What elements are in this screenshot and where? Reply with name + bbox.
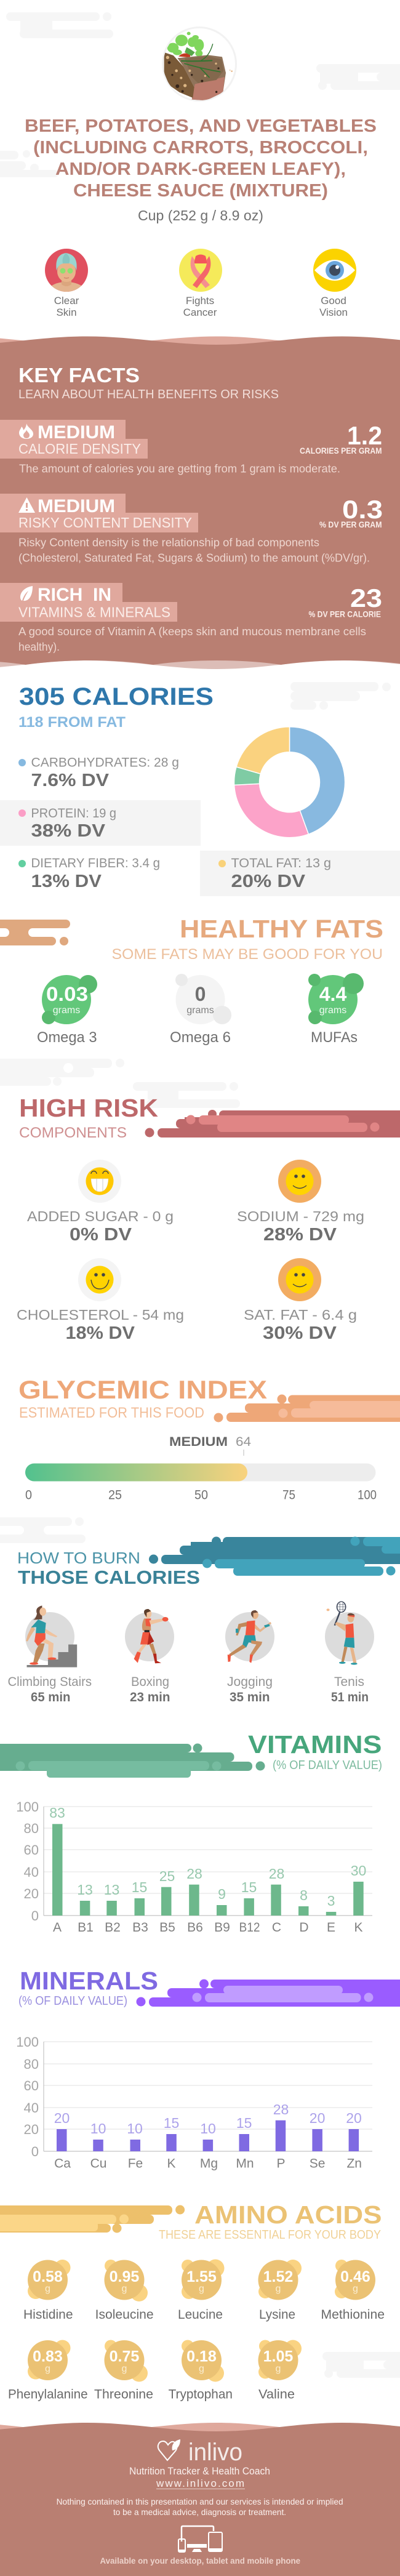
fact name: RISKY CONTENT DENSITY — [18, 515, 192, 531]
rating: RICH IN — [38, 585, 111, 605]
x axis labels — [54, 2157, 362, 2171]
x axis labels: B12 — [239, 1920, 260, 1935]
disclaimer — [57, 2497, 343, 2517]
amino: histidine — [23, 2260, 73, 2322]
bars — [57, 2121, 359, 2151]
value labels: 20 — [54, 2110, 70, 2126]
decorative banner — [214, 1395, 400, 1422]
amino: histidine: Histidine — [23, 2308, 73, 2322]
stat: omega 3: Omega 3 — [37, 1029, 97, 1046]
benefit: good vision — [313, 249, 356, 318]
gauge scale: 75 — [282, 1488, 295, 1502]
label: Cancer — [183, 307, 217, 318]
food photo: steak with greens — [162, 27, 236, 101]
panel: key facts — [0, 336, 400, 669]
legend: protein: PROTEIN: 19 g — [31, 806, 116, 821]
value labels: 10 — [200, 2121, 216, 2137]
value labels: 25 — [159, 1868, 175, 1884]
y axis labels: 100 — [16, 1799, 39, 1815]
amino: histidine: 0.58 — [33, 2268, 63, 2285]
y axis labels: 60 — [24, 1842, 39, 1858]
x axis labels: B6 — [187, 1920, 203, 1935]
y axis labels: 40 — [24, 1864, 39, 1880]
label — [319, 295, 348, 318]
panel: calories — [0, 683, 400, 896]
badge — [0, 583, 177, 622]
subheading: SOME FATS MAY BE GOOD FOR YOU — [112, 946, 383, 963]
rating: MEDIUM — [38, 496, 115, 516]
subheading: ESTIMATED FOR THIS FOOD — [19, 1405, 204, 1421]
stat: cholesterol — [17, 1258, 184, 1343]
value: 23 — [350, 584, 382, 612]
subheading: 118 FROM FAT — [18, 714, 126, 731]
amino: histidine: g — [45, 2284, 50, 2294]
x axis labels: Ca — [54, 2157, 71, 2171]
y axis labels: 20 — [24, 1886, 39, 1901]
decorative banner — [0, 1743, 265, 1778]
x axis labels: B2 — [105, 1920, 121, 1935]
x axis labels: K — [167, 2157, 176, 2171]
heading: HEALTHY FATS — [180, 915, 383, 943]
gauge scale: 0 — [25, 1488, 32, 1502]
fact name: VITAMINS & MINERALS — [18, 604, 170, 620]
decorative banner — [0, 920, 70, 945]
stat: omega 6: grams — [186, 1005, 214, 1016]
amino: isoleucine — [95, 2260, 154, 2322]
amino: threonine: g — [122, 2364, 127, 2374]
x axis labels: E — [327, 1920, 335, 1935]
amino: threonine: Threonine — [94, 2388, 153, 2402]
stat: MUFAs: grams — [319, 1005, 346, 1016]
amino: methionine: 0.46 — [340, 2268, 370, 2285]
exercise: climbing stairs: Climbing Stairs — [7, 1675, 92, 1689]
exercise: tennis: Tenis — [334, 1675, 364, 1689]
stat: sodium: 28% DV — [263, 1225, 337, 1245]
value: 0.3 — [342, 495, 383, 524]
stat: cholesterol: CHOLESTEROL - 54 mg — [17, 1307, 184, 1323]
stat: cholesterol: 18% DV — [65, 1323, 135, 1343]
heading: HIGH RISK — [19, 1094, 158, 1122]
label: Skin — [56, 307, 77, 318]
subheading: (% OF DAILY VALUE) — [18, 1994, 127, 2008]
panel: healthy fats — [0, 915, 383, 1046]
unit: % DV PER GRAM — [319, 520, 382, 529]
stat: added sugar: 0% DV — [70, 1225, 132, 1245]
legend: total fat — [200, 851, 400, 896]
unit: CALORIES PER GRAM — [300, 446, 382, 455]
title: CHEESE SAUCE (MIXTURE) — [73, 181, 328, 201]
badge — [0, 494, 198, 532]
amino: leucine: Leucine — [178, 2308, 223, 2322]
label — [183, 295, 217, 318]
icon: ribbon — [179, 249, 222, 292]
title — [25, 116, 377, 201]
x axis labels: Mg — [200, 2157, 218, 2171]
availability note: Available on your desktop, tablet and mobile phone — [100, 2556, 300, 2566]
y axis labels: 0 — [31, 1908, 39, 1924]
value labels: 9 — [218, 1886, 226, 1902]
amino: tryptophan: 0.18 — [186, 2348, 217, 2365]
stat: added sugar — [27, 1160, 174, 1245]
title: BEEF, POTATOES, AND VEGETABLES — [25, 116, 377, 136]
icon: flame — [19, 423, 33, 439]
amino: tryptophan: g — [199, 2364, 204, 2374]
footer background waves — [0, 2423, 400, 2576]
value labels: 10 — [90, 2121, 106, 2137]
bars — [52, 1824, 364, 1916]
donut chart: macronutrients — [234, 727, 345, 838]
amino: methionine — [321, 2260, 385, 2322]
label: Good — [321, 295, 346, 307]
stat: saturated fat: SAT. FAT - 6.4 g — [244, 1307, 357, 1323]
bar chart: vitamins — [16, 1799, 372, 1935]
y axis labels — [16, 2034, 39, 2159]
value labels: 28 — [269, 1866, 284, 1882]
heading: VITAMINS — [248, 1730, 382, 1759]
title: AND/OR DARK-GREEN LEAFY), — [55, 159, 346, 179]
x axis labels: B5 — [159, 1920, 175, 1935]
amino: valine: 1.05 — [263, 2348, 293, 2365]
icon: warning — [18, 497, 35, 513]
subheading: COMPONENTS — [19, 1125, 127, 1141]
exercise: boxing: Boxing — [131, 1675, 169, 1689]
legend: dietary fiber — [18, 856, 160, 891]
x axis labels: P — [276, 2157, 286, 2171]
y axis labels: 100 — [16, 2034, 39, 2050]
heading: AMINO ACIDS — [194, 2201, 382, 2229]
x axis labels: B1 — [78, 1920, 94, 1935]
gauge scale: 50 — [194, 1488, 208, 1502]
icon: woman with towel and cucumber — [45, 249, 88, 292]
amino: isoleucine: g — [122, 2284, 127, 2294]
description: Risky Content density is the relationship of bad components — [18, 537, 319, 549]
amino: lysine: g — [276, 2284, 281, 2294]
grid and axes — [44, 2042, 372, 2151]
exercise: tennis — [325, 1602, 374, 1704]
bar chart: minerals — [16, 2034, 372, 2171]
amino: phenylalanine: Phenylalanine — [8, 2388, 88, 2402]
rating: MEDIUM — [169, 1435, 228, 1449]
icon: leaf — [20, 586, 33, 601]
y axis labels: 0 — [31, 2144, 39, 2159]
x axis labels: A — [53, 1920, 62, 1935]
fact: rich in vitamins and minerals — [0, 583, 382, 653]
y axis labels: 40 — [24, 2100, 39, 2116]
badge — [0, 420, 148, 459]
decorative banner — [0, 2205, 185, 2233]
amino: leucine: g — [199, 2284, 204, 2294]
stat: saturated fat: 30% DV — [263, 1323, 337, 1343]
description: healthy). — [18, 641, 60, 653]
amino: methionine: g — [353, 2284, 358, 2294]
value labels: 28 — [186, 1866, 202, 1882]
exercise: tennis: 51 min — [331, 1690, 369, 1704]
amino: phenylalanine: 0.83 — [33, 2348, 63, 2365]
heading: KEY FACTS — [18, 364, 140, 387]
legend: dietary fiber: DIETARY FIBER: 3.4 g — [31, 856, 160, 870]
panel: vitamins — [0, 1730, 382, 1935]
decorative banner — [137, 1980, 400, 2007]
y axis labels: 60 — [24, 2078, 39, 2093]
amino: methionine: Methionine — [321, 2308, 385, 2322]
tagline: Nutrition Tracker & Health Coach — [129, 2466, 270, 2477]
value labels: 13 — [77, 1882, 93, 1898]
x axis labels: B9 — [214, 1920, 230, 1935]
stat: omega 3 — [37, 975, 97, 1046]
grid and axes — [44, 1807, 372, 1916]
subheading: (% OF DAILY VALUE) — [273, 1759, 382, 1772]
amino: leucine: 1.55 — [186, 2268, 217, 2285]
stat: omega 6 — [170, 974, 231, 1046]
description: A good source of Vitamin A (keeps skin and mucous membrane cells — [18, 625, 366, 638]
value labels: 20 — [310, 2110, 325, 2126]
description: (Cholesterol, Saturated Fat, Sugars & Sodium) to the amount (%DV/gr). — [18, 552, 370, 564]
value labels: 28 — [273, 2101, 289, 2117]
rating: MEDIUM — [38, 422, 115, 443]
stat: MUFAs: 4.4 — [319, 983, 346, 1005]
stat: MUFAs — [308, 973, 364, 1046]
icon: devices — [178, 2526, 222, 2552]
fact name: CALORIE DENSITY — [18, 441, 141, 457]
x axis labels: C — [272, 1920, 281, 1935]
value: 64 — [236, 1435, 251, 1449]
disclaimer: Nothing contained in this presentation and our services is intended or implied — [57, 2497, 343, 2506]
benefit: clear skin — [45, 249, 88, 318]
heading: 305 CALORIES — [19, 683, 214, 710]
label: Vision — [319, 307, 348, 318]
panel: how to burn those calories — [7, 1536, 400, 1704]
icon: eye — [313, 249, 356, 292]
exercise: boxing: 23 min — [130, 1690, 170, 1704]
stat: added sugar: ADDED SUGAR - 0 g — [27, 1208, 174, 1224]
subheading: THESE ARE ESSENTIAL FOR YOUR BODY — [159, 2228, 381, 2242]
value labels: 15 — [236, 2115, 252, 2131]
icon: jogger — [228, 1610, 271, 1663]
exercise: climbing stairs: 65 min — [31, 1690, 70, 1704]
background clouds: header — [0, 12, 400, 177]
panel: amino acids — [0, 2201, 385, 2402]
value labels: 8 — [300, 1887, 308, 1903]
x axis labels: Cu — [90, 2157, 106, 2171]
background cloud: burn — [0, 1517, 86, 1543]
heading line 1: HOW TO BURN — [17, 1549, 140, 1567]
value: 1.2 — [347, 421, 382, 450]
y axis labels — [16, 1799, 39, 1924]
exercise: boxing — [125, 1609, 174, 1704]
heading: GLYCEMIC INDEX — [18, 1375, 267, 1404]
benefit: fights cancer — [179, 249, 222, 318]
amino: lysine — [258, 2260, 302, 2322]
stat: omega 6: Omega 6 — [170, 1029, 231, 1046]
stat: omega 3: grams — [53, 1005, 80, 1016]
x axis labels: Fe — [128, 2157, 143, 2171]
heading line 2: THOSE CALORIES — [18, 1567, 200, 1588]
legend: dietary fiber: 13% DV — [31, 872, 102, 891]
value labels: 15 — [241, 1879, 257, 1895]
website link: www.inlivo.com — [156, 2478, 244, 2489]
background cloud: calories — [290, 682, 391, 710]
x axis labels: K — [354, 1920, 363, 1935]
serving size: Cup (252 g / 8.9 oz) — [138, 207, 263, 223]
exercise: jogging — [225, 1610, 274, 1704]
amino: isoleucine: Isoleucine — [95, 2308, 154, 2322]
legend: protein: 38% DV — [31, 821, 106, 841]
y axis labels: 20 — [24, 2122, 39, 2137]
gauge scale: 25 — [108, 1488, 122, 1502]
amino: phenylalanine — [8, 2340, 88, 2402]
stat: sodium: SODIUM - 729 mg — [237, 1208, 364, 1224]
value labels: 15 — [132, 1879, 147, 1895]
y axis labels: 80 — [24, 1821, 39, 1836]
fact: risky content density — [0, 494, 383, 564]
exercise: climbing stairs — [7, 1605, 92, 1704]
amino: threonine — [94, 2340, 153, 2402]
amino: tryptophan — [169, 2340, 233, 2402]
amino: lysine: 1.52 — [263, 2268, 293, 2285]
logo: inlivo — [158, 2439, 242, 2466]
decorative banner — [149, 1536, 400, 1576]
unit: % DV PER CALORIE — [309, 609, 381, 619]
stat: sodium — [237, 1160, 364, 1245]
value labels: 15 — [164, 2115, 179, 2131]
stat: omega 6: 0 — [195, 983, 206, 1005]
amino: threonine: 0.75 — [110, 2348, 139, 2365]
gauge — [25, 1450, 375, 1481]
panel: minerals — [16, 1967, 400, 2171]
stat: MUFAs: MUFAs — [311, 1029, 358, 1046]
legend: carbohydrates — [18, 756, 179, 790]
steak illustration — [164, 32, 233, 100]
x axis labels: Zn — [346, 2157, 362, 2171]
amino: isoleucine: 0.95 — [110, 2268, 139, 2285]
value labels: 30 — [351, 1863, 366, 1879]
decorative banner — [145, 1110, 400, 1138]
description — [18, 625, 366, 653]
label: Fights — [186, 295, 214, 307]
legend: total fat: TOTAL FAT: 13 g — [231, 856, 331, 870]
icon: woman climbing stairs — [26, 1605, 77, 1667]
subheading: LEARN ABOUT HEALTH BENEFITS OR RISKS — [18, 388, 279, 401]
panel: glycemic index — [18, 1375, 400, 1502]
x axis labels: Se — [310, 2157, 325, 2171]
description — [18, 537, 370, 564]
amino: phenylalanine: g — [45, 2364, 50, 2374]
label — [54, 295, 79, 318]
legend: carbohydrates: 7.6% DV — [31, 771, 110, 790]
panel: high risk components — [17, 1094, 400, 1343]
panel background waves — [0, 336, 400, 669]
amino: tryptophan: Tryptophan — [169, 2388, 233, 2402]
legend: carbohydrates: CARBOHYDRATES: 28 g — [31, 756, 179, 770]
x axis labels: Mn — [236, 2157, 254, 2171]
gauge scale — [25, 1488, 377, 1502]
stat: omega 3: 0.03 — [46, 983, 88, 1005]
value labels: 20 — [346, 2110, 362, 2126]
logo: inlivo: inlivo — [188, 2439, 242, 2466]
amino: valine — [258, 2340, 302, 2402]
description: The amount of calories you are getting from 1 gram is moderate. — [19, 463, 340, 475]
amino: lysine: Lysine — [259, 2308, 295, 2322]
title: (INCLUDING CARROTS, BROCCOLI, — [33, 138, 368, 158]
background clouds: high risk — [0, 1059, 240, 1108]
background cloud: amino acids — [322, 2352, 400, 2378]
disclaimer: to be a medical advice, diagnosis or treatment. — [113, 2507, 286, 2517]
x axis labels: D — [299, 1920, 309, 1935]
label: Clear — [54, 295, 79, 307]
amino: valine: Valine — [258, 2388, 295, 2402]
fact: calorie density — [0, 420, 382, 475]
value labels — [49, 1805, 366, 1909]
icon: boxer — [134, 1609, 169, 1663]
x axis labels — [53, 1920, 363, 1935]
legend: protein — [0, 800, 201, 846]
icon: tennis player — [327, 1602, 358, 1665]
value labels — [54, 2101, 362, 2137]
exercise: jogging: Jogging — [227, 1675, 273, 1689]
y axis labels: 80 — [24, 2056, 39, 2072]
value labels: 83 — [49, 1805, 65, 1821]
photo ring — [162, 27, 236, 101]
exercise: jogging: 35 min — [230, 1690, 270, 1704]
legend: total fat: 20% DV — [231, 872, 306, 891]
value labels: 3 — [327, 1893, 335, 1909]
gauge scale: 100 — [358, 1488, 377, 1502]
stat: saturated fat — [244, 1258, 357, 1343]
value labels: 13 — [104, 1882, 119, 1898]
amino: valine: g — [276, 2364, 281, 2374]
heading: MINERALS — [20, 1967, 158, 1995]
x axis labels: B3 — [132, 1920, 148, 1935]
amino: leucine — [178, 2259, 224, 2322]
panel: footer — [0, 2423, 400, 2576]
value labels: 10 — [127, 2121, 143, 2137]
